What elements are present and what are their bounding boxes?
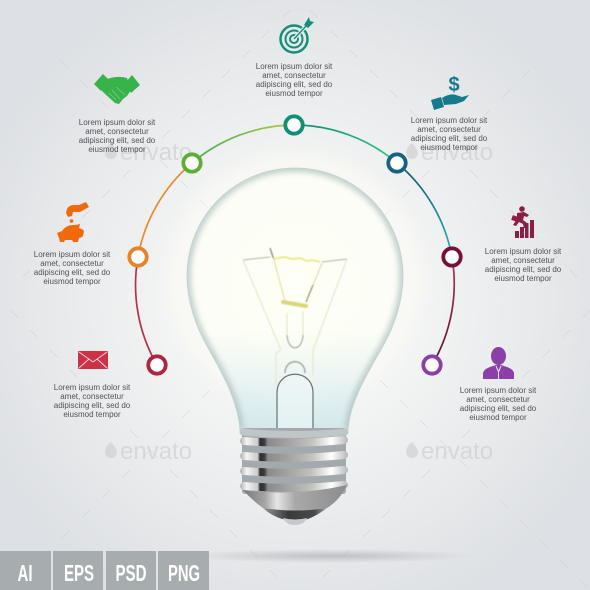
- bulb glow: [167, 152, 423, 408]
- text: handshake: [79, 118, 156, 154]
- watermark: envato bottom left: envato: [120, 438, 192, 465]
- node: blue teal: [388, 154, 406, 172]
- floor shadow: [185, 549, 475, 563]
- text: target: adipiscing elit, sed do: [256, 80, 333, 89]
- icon: hand with dollar: $: [448, 74, 460, 96]
- text: envelope: adipiscing elit, sed do: [54, 401, 131, 410]
- text: piggy bank: Lorem ipsum dolor sit: [34, 250, 111, 259]
- contact ring: [263, 508, 327, 520]
- text: envelope: eiusmod tempor: [63, 410, 121, 419]
- icon: piggy bank: [57, 202, 89, 242]
- watermark: envato top right: envato: [421, 139, 493, 166]
- base thread: [242, 428, 346, 494]
- base cone: [243, 485, 347, 510]
- text: handshake: Lorem ipsum dolor sit: [79, 118, 156, 127]
- text: runner on bars: Lorem ipsum dolor sit: [485, 247, 562, 256]
- badge: EPS: [53, 551, 103, 590]
- glass envelope: [187, 168, 403, 430]
- filament and supports: [243, 248, 347, 385]
- text: target: amet, consectetur: [262, 71, 326, 80]
- text: hand with dollar: Lorem ipsum dolor sit: [411, 116, 488, 125]
- text: envelope: Lorem ipsum dolor sit: [54, 383, 131, 392]
- text: hand with dollar: [411, 116, 488, 152]
- text: envelope: [54, 383, 131, 419]
- badge: PSD: [106, 551, 156, 590]
- screw base: [242, 428, 347, 525]
- icon: hand with dollar: [431, 74, 469, 110]
- badge: PNG: PNG: [168, 560, 200, 586]
- icon: envelope: [78, 351, 108, 369]
- badge: PNG: [158, 551, 209, 590]
- text: piggy bank: adipiscing elit, sed do: [34, 268, 111, 277]
- badge: EPS: EPS: [64, 560, 94, 586]
- node: teal: [285, 116, 303, 134]
- text: piggy bank: amet, consectetur: [40, 259, 104, 268]
- icon: businessman: [483, 347, 514, 379]
- text: businessman: [460, 386, 537, 422]
- text: handshake: eiusmod tempor: [88, 145, 146, 154]
- text: runner on bars: eiusmod tempor: [494, 274, 552, 283]
- text: handshake: adipiscing elit, sed do: [79, 136, 156, 145]
- node: green: [183, 154, 201, 172]
- text: hand with dollar: adipiscing elit, sed do: [411, 134, 488, 143]
- badge: AI: [0, 551, 51, 590]
- icon: target: [280, 17, 314, 52]
- text: handshake: amet, consectetur: [85, 127, 149, 136]
- node: crimson: [148, 356, 166, 374]
- badge: AI: AI: [18, 560, 32, 586]
- watermark: envato bottom right: envato: [421, 438, 493, 465]
- text: businessman: adipiscing elit, sed do: [460, 404, 537, 413]
- text: hand with dollar: amet, consectetur: [417, 125, 481, 134]
- glass stem: [277, 374, 313, 430]
- text: target: eiusmod tempor: [265, 89, 323, 98]
- text: runner on bars: amet, consectetur: [491, 256, 555, 265]
- text: runner on bars: [485, 247, 562, 283]
- watermark: envato top left: envato: [120, 139, 192, 166]
- text: target: [256, 62, 333, 98]
- text: piggy bank: eiusmod tempor: [43, 277, 101, 286]
- text: target: Lorem ipsum dolor sit: [256, 62, 333, 71]
- text: businessman: amet, consectetur: [466, 395, 530, 404]
- badge: PSD: PSD: [116, 560, 146, 586]
- text: businessman: eiusmod tempor: [469, 413, 527, 422]
- node: purple: [423, 356, 441, 374]
- text: runner on bars: adipiscing elit, sed do: [485, 265, 562, 274]
- text: businessman: Lorem ipsum dolor sit: [460, 386, 537, 395]
- text: hand with dollar: eiusmod tempor: [420, 143, 478, 152]
- icon: runner on bars: [511, 206, 534, 238]
- light bulb: [186, 168, 404, 525]
- node: maroon: [443, 248, 461, 266]
- connecting arc: [136, 125, 454, 365]
- icon: handshake: [94, 74, 140, 104]
- contact tip: [283, 518, 307, 525]
- node: orange: [129, 248, 147, 266]
- text: piggy bank: [34, 250, 111, 286]
- text: envelope: amet, consectetur: [60, 392, 124, 401]
